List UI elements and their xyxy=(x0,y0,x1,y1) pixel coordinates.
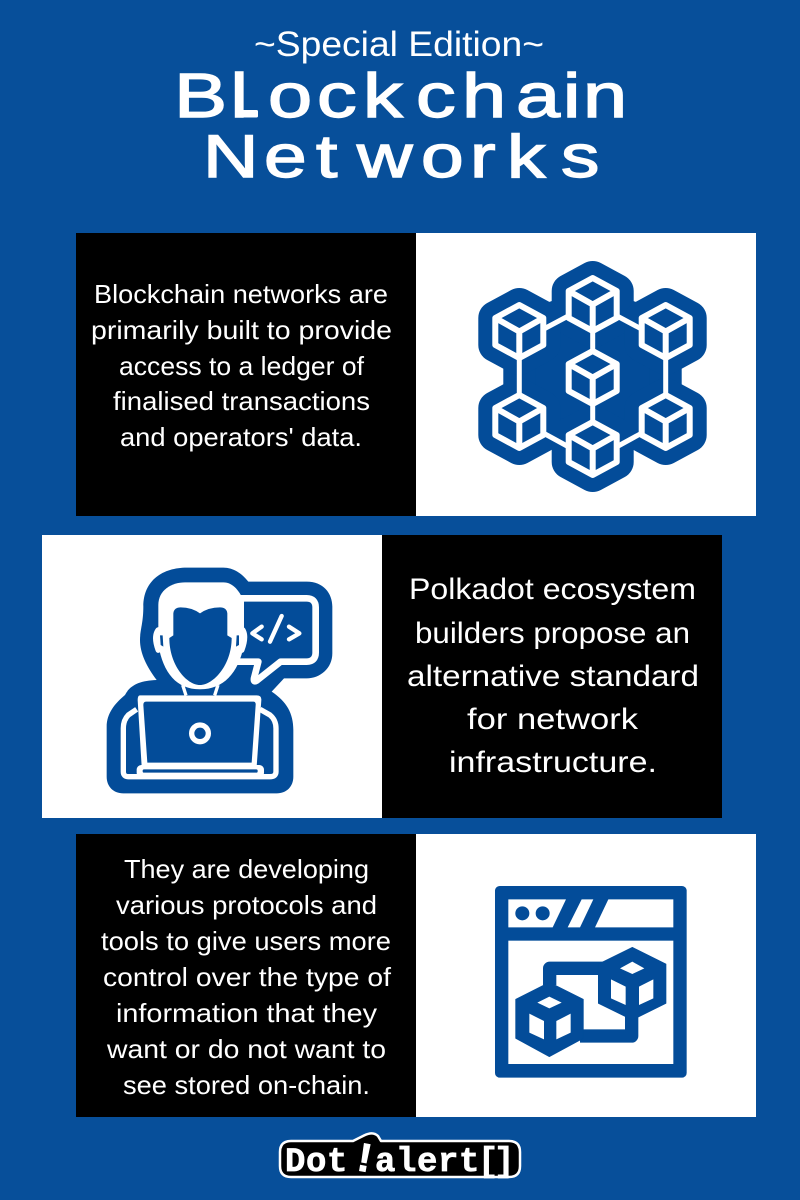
text: protocols paragraph: see stored on-chain. xyxy=(123,1070,370,1100)
icon: cube network xyxy=(495,278,690,475)
text: polkadot paragraph: for network xyxy=(467,703,638,736)
icon box: developer xyxy=(42,535,382,818)
text box: protocols xyxy=(76,834,416,1117)
icon: browser window with cubes xyxy=(495,886,687,1078)
icon box: network xyxy=(416,233,756,516)
text: polkadot paragraph: alternative standard xyxy=(407,660,699,693)
panel: polkadot builders xyxy=(42,535,722,818)
text: polkadot paragraph: builders propose an xyxy=(415,617,690,650)
text: protocols paragraph: various protocols and xyxy=(116,890,377,920)
text box: polkadot xyxy=(382,535,722,818)
text: protocols paragraph xyxy=(101,854,392,1100)
icon: developer with laptop xyxy=(107,568,332,793)
text: intro paragraph: access to a ledger of xyxy=(119,351,365,381)
text: protocols paragraph: want or do not want to xyxy=(106,1034,386,1064)
title line: Networks: Networks xyxy=(203,123,599,190)
text: protocols paragraph: information that they xyxy=(116,998,377,1028)
title line: Blockchain: Blockchain xyxy=(174,62,627,131)
text: polkadot paragraph: infrastructure. xyxy=(449,746,657,779)
text: intro paragraph xyxy=(91,279,392,452)
logo: Dot!alert[]: ! xyxy=(348,1135,381,1186)
logo: Dot!alert[]: alert[] xyxy=(375,1144,514,1182)
logo: Dot!alert[] xyxy=(280,1133,520,1186)
text: intro paragraph: finalised transactions xyxy=(113,386,370,416)
text: protocols paragraph: control over the type of xyxy=(103,962,392,992)
icon box: browser xyxy=(416,834,756,1117)
text: polkadot paragraph: Polkadot ecosystem xyxy=(409,573,696,606)
panel: blockchain networks intro xyxy=(76,233,756,516)
subtitle: special edition: ~Special Edition~ xyxy=(254,25,544,64)
logo: Dot!alert[]: Dot xyxy=(285,1144,347,1182)
text: protocols paragraph: They are developing xyxy=(124,854,369,884)
text: polkadot paragraph xyxy=(407,573,699,779)
title block xyxy=(174,25,627,190)
text: intro paragraph: primarily built to provide xyxy=(91,315,392,345)
panel: protocols and tools xyxy=(76,834,756,1117)
text: intro paragraph: Blockchain networks are xyxy=(94,279,388,309)
text: protocols paragraph: tools to give users more xyxy=(101,926,391,956)
text: intro paragraph: and operators' data. xyxy=(120,422,362,452)
text box: intro xyxy=(76,233,416,516)
